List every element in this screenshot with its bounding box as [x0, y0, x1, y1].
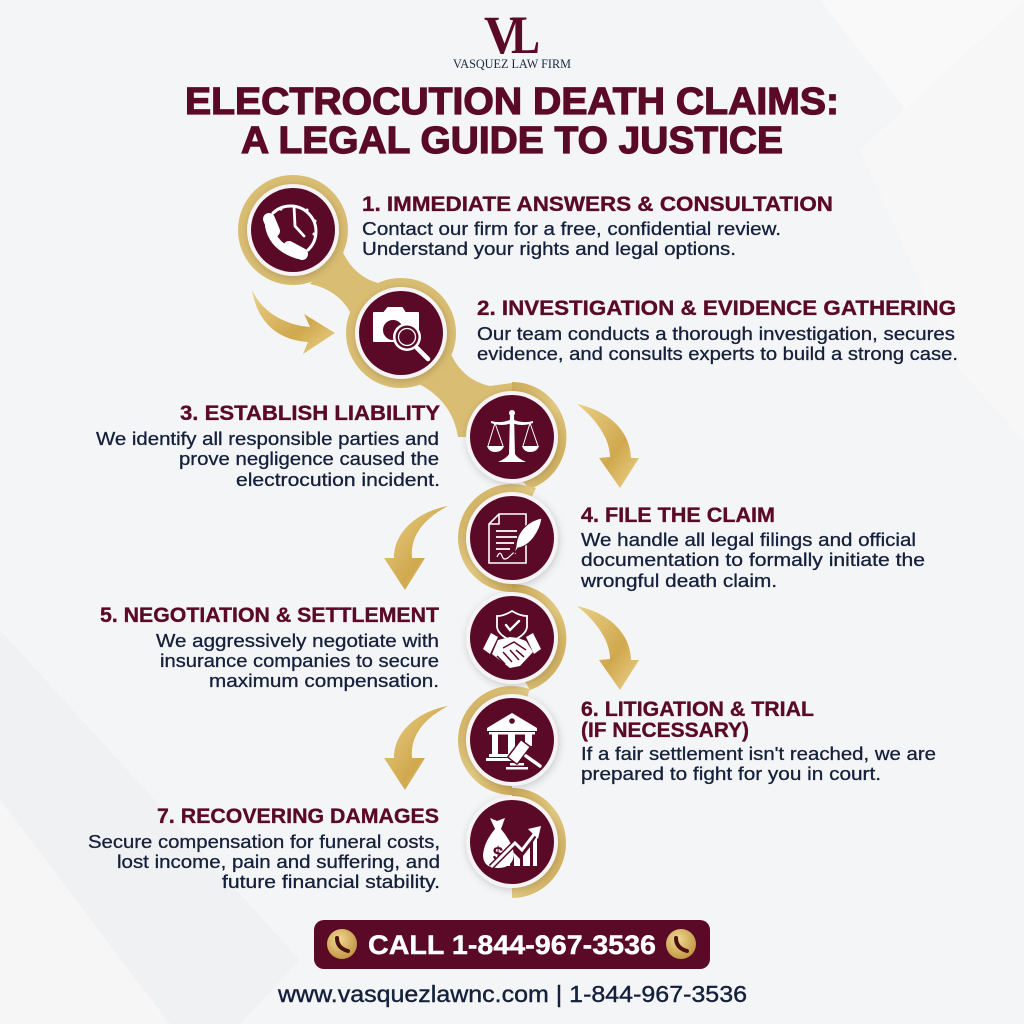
arrow: step 1 to 2 — [252, 290, 335, 354]
logo monogram: V — [484, 5, 520, 65]
body: maximum compensation. — [209, 670, 439, 691]
body: evidence, and consults experts to build a strong case. — [477, 343, 958, 364]
arrow: step 3 to 4 — [577, 404, 639, 488]
step 2 text — [477, 297, 958, 364]
icon: shield and handshake — [466, 592, 558, 684]
body: wrongful death claim. — [580, 570, 777, 591]
icon: scales of justice — [466, 391, 558, 483]
body: We aggressively negotiate with — [156, 630, 439, 651]
body: If a fair settlement isn't reached, we are — [581, 743, 936, 764]
body: Understand your rights and legal options. — [362, 238, 736, 259]
arrow: step 6 to 7 — [384, 706, 448, 790]
body: We handle all legal filings and official — [581, 529, 916, 550]
body: insurance companies to secure — [160, 650, 439, 671]
heading — [581, 698, 814, 742]
logo monogram: L — [511, 5, 540, 65]
icon: money bag and growth chart — [466, 796, 558, 888]
body — [477, 323, 958, 364]
icon: document and quill — [466, 492, 558, 584]
icon: phone and clock — [247, 184, 339, 276]
call to action button — [314, 920, 710, 969]
gold timeline path — [238, 175, 566, 898]
call text: CALL 1-844-967-3536 — [368, 930, 656, 960]
body: electrocution incident. — [236, 469, 440, 490]
body: prove negligence caused the — [179, 448, 439, 469]
step 3 text — [96, 402, 440, 490]
body — [96, 428, 440, 490]
body: Secure compensation for funeral costs, — [88, 831, 440, 852]
heading: 1. IMMEDIATE ANSWERS & CONSULTATION — [362, 193, 833, 216]
body: We identify all responsible parties and — [96, 428, 439, 449]
body: future financial stability. — [222, 871, 440, 892]
body: Contact our firm for a free, confidential review. — [362, 218, 781, 239]
logo — [453, 5, 571, 71]
heading: 2. INVESTIGATION & EVIDENCE GATHERING — [477, 297, 956, 320]
body — [362, 218, 781, 259]
body: lost income, pain and suffering, and — [117, 851, 440, 872]
heading: 5. NEGOTIATION & SETTLEMENT — [100, 604, 439, 627]
icon: money bag and growth chart: $ — [493, 844, 504, 865]
body — [580, 529, 925, 591]
icon: left phone coin — [327, 929, 357, 959]
step 4 text — [580, 504, 925, 591]
body: documentation to formally initiate the — [581, 549, 925, 570]
body — [156, 630, 439, 691]
heading: (IF NECESSARY) — [581, 719, 749, 742]
body — [581, 743, 936, 784]
body: prepared to fight for you in court. — [581, 763, 881, 784]
body — [88, 831, 440, 892]
icon: courthouse and gavel — [466, 694, 558, 786]
body: Our team conducts a thorough investigation, secures — [477, 323, 955, 344]
heading: 3. ESTABLISH LIABILITY — [180, 402, 440, 425]
step 6 text — [581, 698, 936, 784]
icon: camera and magnifier — [355, 287, 447, 379]
heading: 6. LITIGATION & TRIAL — [581, 698, 814, 721]
step 5 text — [100, 604, 439, 691]
arrow: step 4 to 5 — [384, 506, 448, 590]
title: ELECTROCUTION DEATH CLAIMS: — [185, 81, 839, 123]
heading: 4. FILE THE CLAIM — [581, 504, 775, 527]
footer contact line: www.vasquezlawnc.com | 1-844-967-3536 — [277, 981, 747, 1007]
step 7 text — [88, 805, 440, 892]
title — [185, 81, 839, 162]
arrow: step 5 to 6 — [577, 606, 639, 690]
heading: 7. RECOVERING DAMAGES — [157, 805, 439, 828]
logo monogram — [484, 5, 540, 65]
step 1 text — [362, 193, 833, 259]
icon: right phone coin — [666, 929, 696, 959]
firm name: VASQUEZ LAW FIRM — [453, 57, 571, 71]
title: A LEGAL GUIDE TO JUSTICE — [241, 120, 783, 162]
